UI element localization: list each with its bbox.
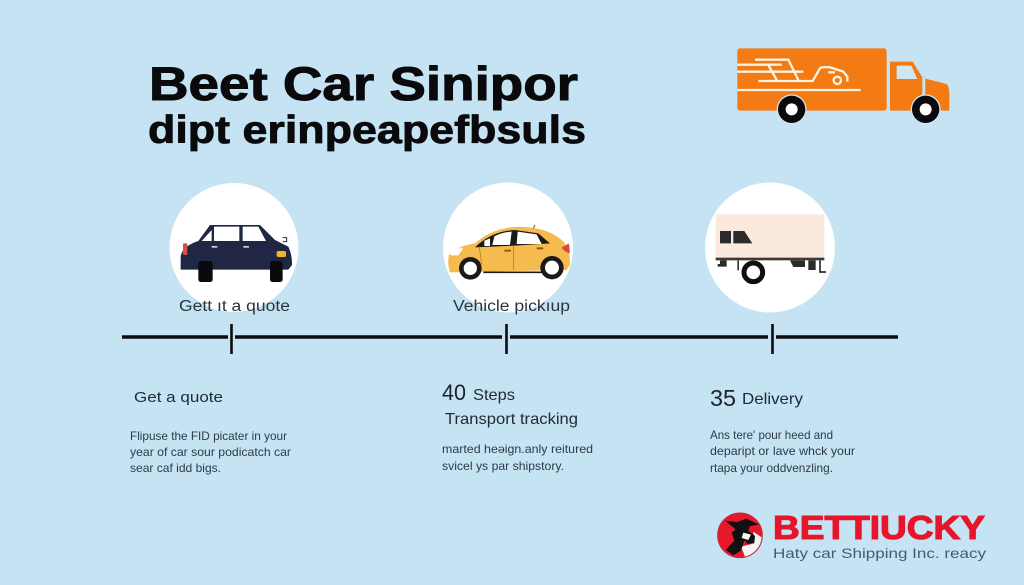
title: Beet Car Sinipor (149, 57, 578, 110)
panel: step 2 text: Steps (473, 387, 515, 404)
panel: step 1 text: year of car sour podicatch car (130, 445, 291, 459)
panel: step 1 text (130, 389, 291, 475)
panel: step 3 text: Delivery (742, 391, 803, 408)
panel: step 3 text: 35 (710, 385, 736, 411)
panel: step 3 text: Ans tere' pour heed and (710, 428, 833, 442)
icon: yellow car (448, 225, 570, 280)
panel: step 2 text: 40 (442, 380, 466, 405)
panel: step 2 circle with yellow car (443, 182, 573, 312)
panel: step 1 text: sear caf idd bigs. (130, 461, 221, 475)
brand name: BETTIUCKY (773, 509, 985, 546)
label: step 2 circle caption: Vehicle pickıup (453, 298, 570, 315)
panel: step 3 text: rtapa your oddvenzling. (710, 461, 833, 475)
logo (718, 509, 986, 561)
tagline: Haty car Shipping Inc. reacy (773, 545, 986, 561)
panel: step 2 text: Transport tracking (445, 411, 578, 428)
panel: step 1 text: Flipuse the FID picater in your (130, 429, 287, 443)
timeline (122, 324, 898, 354)
label: step 1 circle caption: Gett ıt a quote (179, 298, 290, 315)
icon: dark blue car (181, 225, 292, 282)
panel: step 2 text (442, 380, 593, 473)
title (148, 57, 586, 152)
panel: step 3 text: depaript or lave whck your (710, 444, 855, 458)
icon: logo emblem (718, 513, 762, 558)
icon: cream trailer (716, 214, 826, 282)
panel: step 3 text (710, 385, 855, 475)
panel: step 1 circle with dark car (170, 183, 298, 312)
panel: step 1 text: Get a quote (134, 389, 223, 406)
panel: step 3 circle with trailer (705, 182, 835, 312)
panel: step 2 text: svicel ys par shipstory. (442, 459, 564, 473)
panel: step 2 text: marted heəign.anly reitured (442, 442, 593, 456)
icon: orange delivery truck (737, 48, 949, 124)
title: dipt erinpeapefbsuls (148, 109, 586, 152)
